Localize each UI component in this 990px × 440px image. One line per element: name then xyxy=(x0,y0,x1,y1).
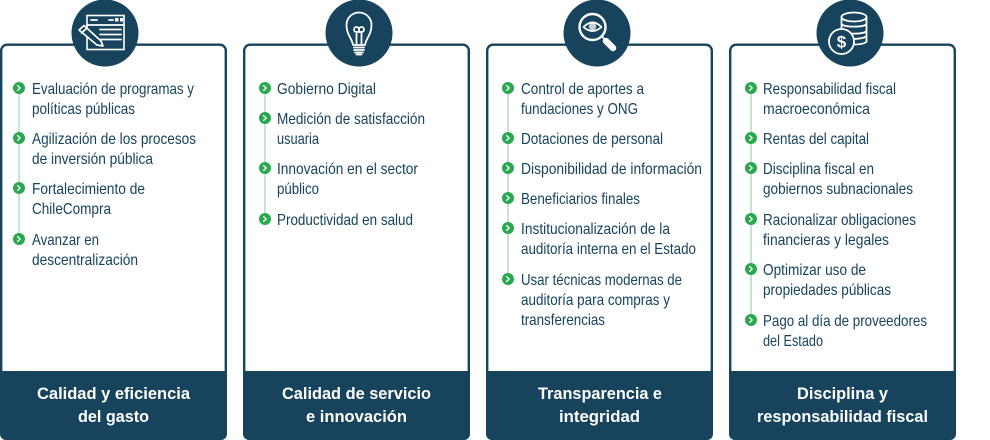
list: Calidad de servicio e innovación: Gobierno Digital xyxy=(277,81,376,98)
list: Calidad de servicio e innovación: Medición de satisfacción xyxy=(277,111,425,128)
list: Disciplina y responsabilidad fiscal xyxy=(745,81,927,350)
footer: Transparencia e integridad: Transparencia e xyxy=(538,384,662,403)
list: Disciplina y responsabilidad fiscal: Rentas del capital xyxy=(763,131,869,148)
list: Transparencia e integridad: auditoría para compras y xyxy=(521,292,670,309)
list: Transparencia e integridad: auditoría interna en el Estado xyxy=(521,241,696,258)
footer: Transparencia e integridad: integridad xyxy=(559,407,640,426)
list: Transparencia e integridad: Disponibilidad de información xyxy=(521,161,702,178)
list: Calidad de servicio e innovación: Innovación en el sector xyxy=(277,161,419,178)
list: Transparencia e integridad: Institucionalización de la xyxy=(521,221,670,238)
list: Calidad y eficiencia del gasto: Avanzar en xyxy=(32,232,99,249)
list: Transparencia e integridad: Control de aportes a xyxy=(521,81,644,98)
footer: Calidad y eficiencia del gasto: del gasto xyxy=(78,407,149,426)
panel: Transparencia e integridad xyxy=(486,0,713,440)
list: Calidad de servicio e innovación xyxy=(259,81,425,229)
list: Disciplina y responsabilidad fiscal: gobiernos subnacionales xyxy=(763,181,913,198)
list: Disciplina y responsabilidad fiscal: macroeconómica xyxy=(763,101,870,118)
footer: Disciplina y responsabilidad fiscal: Disciplina y xyxy=(797,384,889,403)
panel: Calidad de servicio e innovación xyxy=(243,0,470,440)
list: Transparencia e integridad: Usar técnicas modernas de xyxy=(521,272,682,289)
footer: Disciplina y responsabilidad fiscal: responsabilidad fiscal xyxy=(757,407,928,426)
list: Transparencia e integridad: Dotaciones de personal xyxy=(521,131,663,148)
list: Disciplina y responsabilidad fiscal: Racionalizar obligaciones xyxy=(763,212,916,229)
list: Disciplina y responsabilidad fiscal: del Estado xyxy=(763,333,823,350)
footer: Calidad y eficiencia del gasto: Calidad y eficiencia xyxy=(37,384,191,403)
footer: Disciplina y responsabilidad fiscal xyxy=(729,371,956,440)
list: Disciplina y responsabilidad fiscal: financieras y legales xyxy=(763,232,889,249)
list: Calidad y eficiencia del gasto: Evaluación de programas y xyxy=(32,81,194,98)
footer: Calidad de servicio e innovación xyxy=(243,371,470,440)
footer: Calidad de servicio e innovación: Calidad de servicio xyxy=(282,384,431,403)
list: Disciplina y responsabilidad fiscal: Responsabilidad fiscal xyxy=(763,81,896,98)
list: Calidad y eficiencia del gasto: descentralización xyxy=(32,252,138,269)
icon: magnifying glass with eye xyxy=(564,0,630,66)
list: Calidad y eficiencia del gasto: ChileCompra xyxy=(32,201,111,218)
list: Transparencia e integridad xyxy=(502,81,702,329)
icon: form and pencil xyxy=(72,0,138,66)
footer: Calidad de servicio e innovación: e innovación xyxy=(306,407,407,426)
list: Calidad y eficiencia del gasto: de inversión pública xyxy=(32,151,153,168)
footer: Calidad y eficiencia del gasto xyxy=(0,371,227,440)
icon: coin stack with dollar: $ xyxy=(837,32,847,52)
list: Disciplina y responsabilidad fiscal: propiedades públicas xyxy=(763,282,891,299)
list: Disciplina y responsabilidad fiscal: Disciplina fiscal en xyxy=(763,161,874,178)
list: Calidad y eficiencia del gasto: políticas públicas xyxy=(32,101,135,118)
list: Transparencia e integridad: transferencias xyxy=(521,312,605,329)
list: Calidad y eficiencia del gasto: Fortalecimiento de xyxy=(32,181,145,198)
panel: Disciplina y responsabilidad fiscal xyxy=(729,0,956,440)
list: Calidad y eficiencia del gasto xyxy=(13,81,196,269)
icon: coin stack with dollar xyxy=(816,0,884,66)
footer: Transparencia e integridad xyxy=(486,371,713,440)
list: Disciplina y responsabilidad fiscal: Optimizar uso de xyxy=(763,262,866,279)
list: Calidad de servicio e innovación: usuaria xyxy=(277,131,319,148)
list: Transparencia e integridad: Beneficiarios finales xyxy=(521,191,640,208)
list: Calidad y eficiencia del gasto: Agilización de los procesos xyxy=(32,131,196,148)
list: Calidad de servicio e innovación: Productividad en salud xyxy=(277,212,413,229)
list: Disciplina y responsabilidad fiscal: Pago al día de proveedores xyxy=(763,313,927,330)
list: Calidad de servicio e innovación: público xyxy=(277,181,319,198)
list: Transparencia e integridad: fundaciones y ONG xyxy=(521,101,638,118)
icon: light bulb xyxy=(326,0,392,66)
panel: Calidad y eficiencia del gasto xyxy=(0,0,227,440)
